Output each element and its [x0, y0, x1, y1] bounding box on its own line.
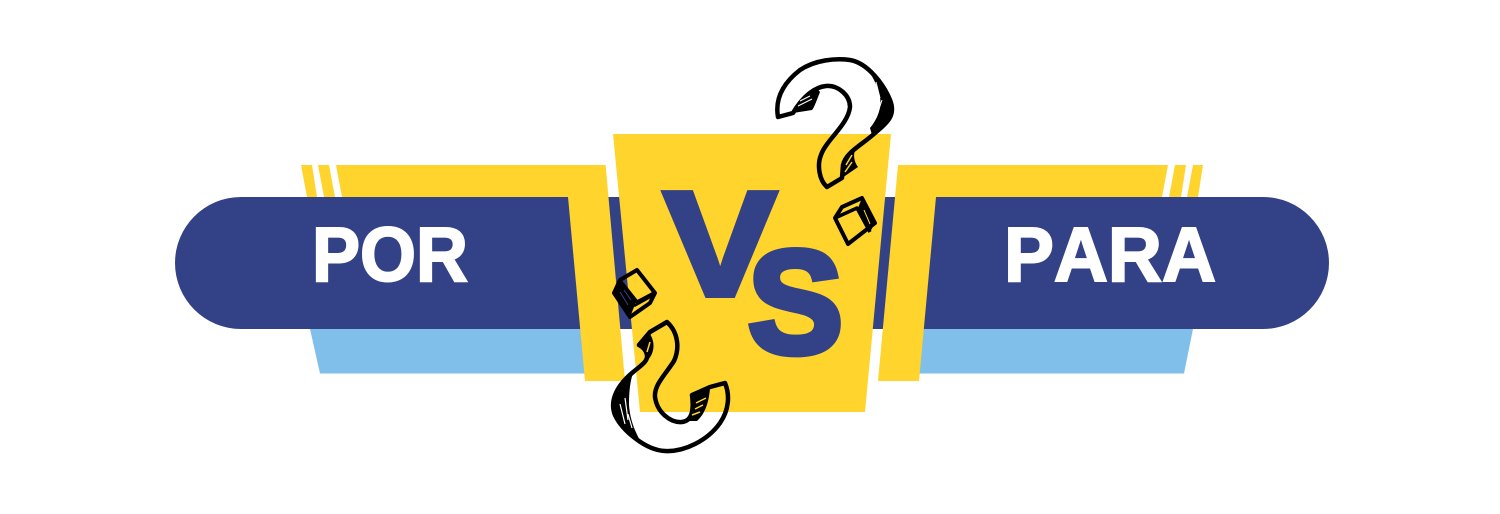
letter: V: V — [664, 162, 776, 327]
navy pill banner — [175, 197, 1329, 329]
icon: bottom cube — [614, 270, 655, 317]
light blue band: left — [310, 329, 600, 374]
letter: S: S — [748, 220, 843, 384]
top band: right — [900, 165, 1168, 197]
light blue band: right — [900, 329, 1193, 374]
yellow bracket: left — [568, 165, 625, 381]
heading: PARA: PARA — [1004, 212, 1216, 298]
icon: bottom question mark — [613, 322, 728, 451]
icon: top cube — [835, 198, 875, 244]
top stripes: right — [1169, 165, 1203, 197]
icon: top question mark — [777, 59, 892, 187]
top stripes: left — [301, 165, 335, 197]
top band: left — [336, 165, 600, 197]
yellow bracket: right — [878, 165, 940, 381]
central yellow panel — [613, 134, 891, 412]
heading: POR: POR — [312, 212, 468, 298]
